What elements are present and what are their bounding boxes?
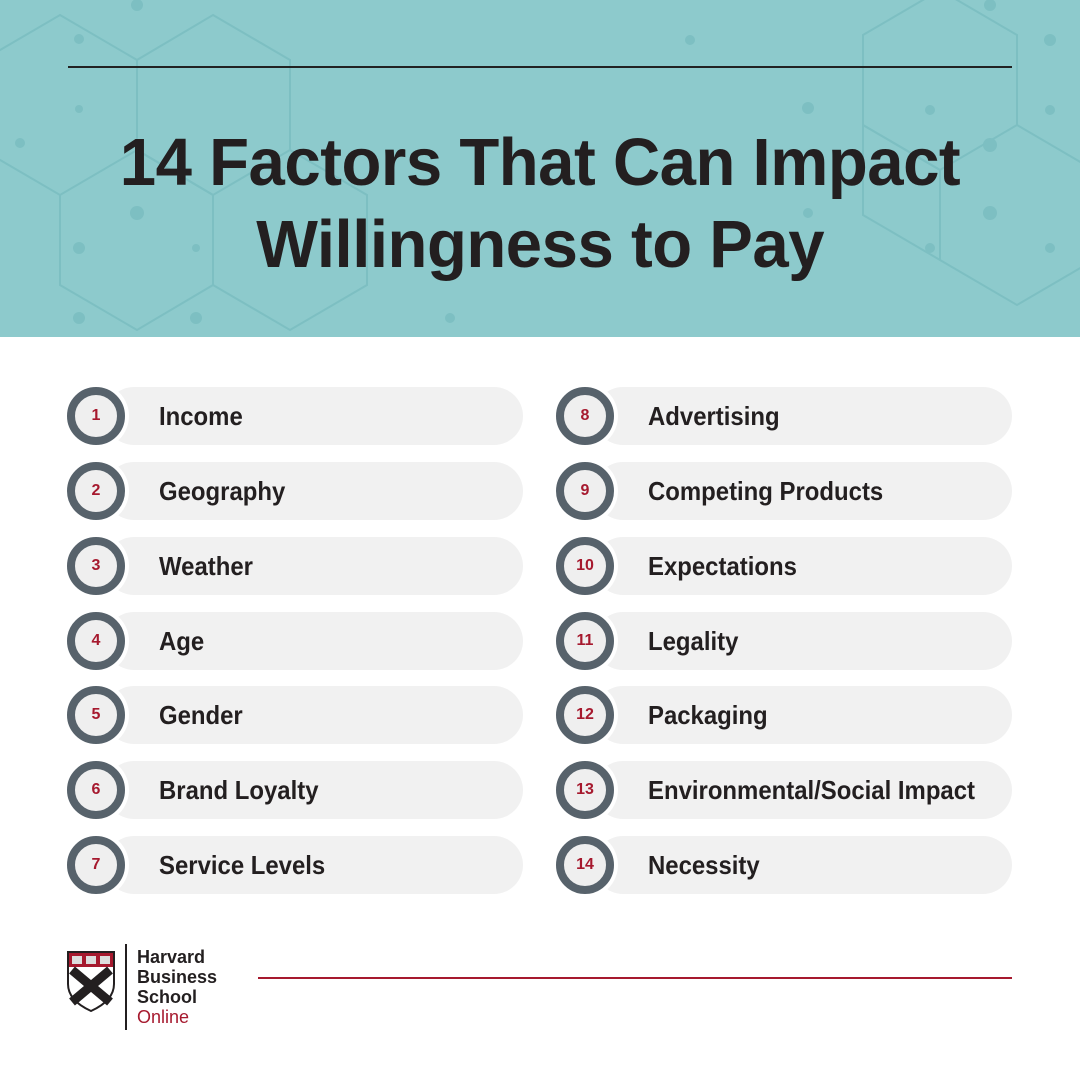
- item 10: Expectations: [648, 551, 797, 581]
- icon: shield: [67, 951, 115, 1012]
- item 12: 12: [576, 706, 594, 723]
- logo text: School: [137, 987, 197, 1007]
- item 6: Brand Loyalty: [159, 775, 319, 805]
- item 6: [67, 761, 523, 819]
- logo: HBS Online: [67, 944, 217, 1030]
- item 12: Packaging: [648, 700, 768, 730]
- title: 14 Factors That Can Impact: [120, 125, 960, 200]
- item 10: 10: [576, 557, 594, 574]
- item 7: Service Levels: [159, 850, 325, 880]
- logo text: Online: [137, 1007, 189, 1027]
- item 5: [67, 686, 523, 744]
- logo text: [137, 947, 217, 1027]
- logo text: Business: [137, 967, 217, 987]
- list: right column: [556, 387, 1012, 894]
- item 1: Income: [159, 401, 243, 431]
- item 9: [556, 462, 1012, 520]
- item 9: 9: [581, 482, 589, 499]
- item 8: 8: [581, 407, 589, 424]
- item 2: Geography: [159, 476, 285, 506]
- item 14: [556, 836, 1012, 894]
- item 2: 2: [92, 482, 100, 499]
- item 13: 13: [576, 781, 594, 798]
- item 11: 11: [577, 632, 593, 649]
- item 14: 14: [576, 856, 594, 873]
- title: [120, 125, 960, 282]
- item 13: Environmental/Social Impact: [648, 775, 975, 805]
- item 8: [556, 387, 1012, 445]
- item 1: 1: [92, 407, 100, 424]
- item 4: 4: [92, 632, 100, 649]
- list: left column: [67, 387, 523, 894]
- footer rule: [258, 977, 1012, 979]
- item 3: Weather: [159, 551, 253, 581]
- item 2: [67, 462, 523, 520]
- item 10: [556, 537, 1012, 595]
- item 14: Necessity: [648, 850, 760, 880]
- item 5: 5: [92, 706, 100, 723]
- item 6: 6: [92, 781, 100, 798]
- item 4: Age: [159, 626, 204, 656]
- item 1: [67, 387, 523, 445]
- item 7: [67, 836, 523, 894]
- item 9: Competing Products: [648, 476, 883, 506]
- title: Willingness to Pay: [256, 207, 824, 282]
- item 12: [556, 686, 1012, 744]
- item 11: [556, 612, 1012, 670]
- logo text: Harvard: [137, 947, 205, 967]
- item 13: [556, 761, 1012, 819]
- item 3: [67, 537, 523, 595]
- item 7: 7: [92, 856, 100, 873]
- item 4: [67, 612, 523, 670]
- item 8: Advertising: [648, 401, 780, 431]
- item 11: Legality: [648, 626, 738, 656]
- item 5: Gender: [159, 700, 243, 730]
- item 3: 3: [92, 557, 100, 574]
- header banner: [0, 0, 1080, 337]
